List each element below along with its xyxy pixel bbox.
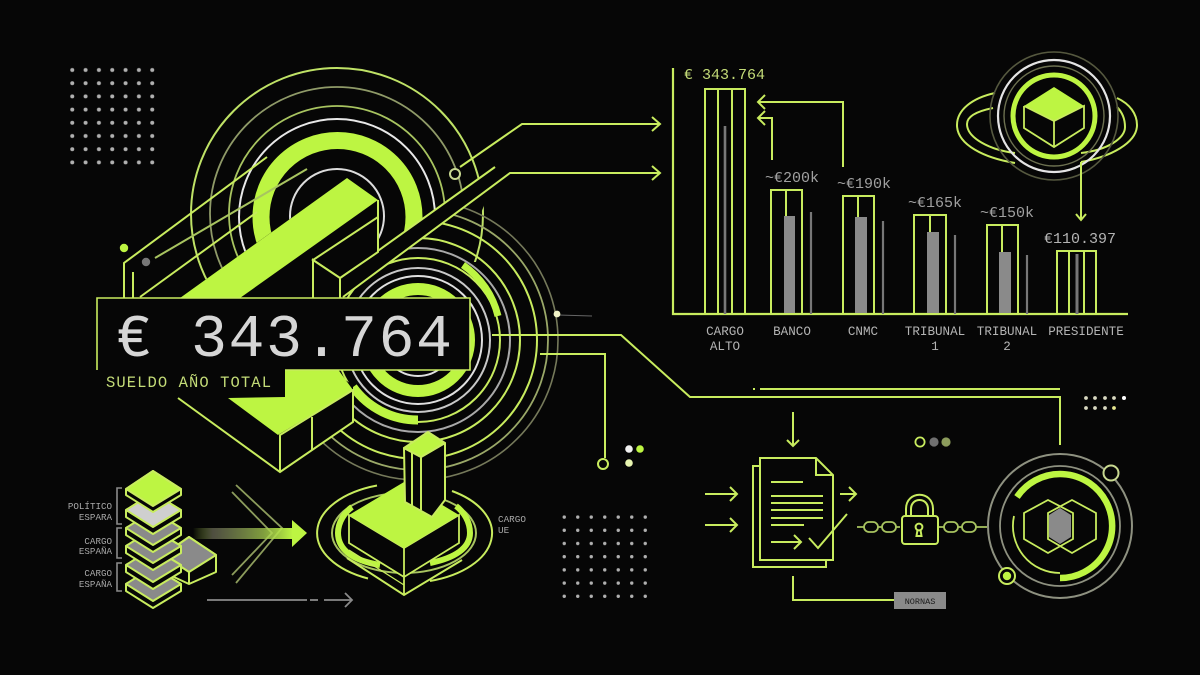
category labels: CNMC [848, 325, 879, 339]
value labels: €110.397 [1044, 231, 1116, 248]
icon: document with check [753, 458, 847, 567]
bar: tribunal 1 [914, 215, 955, 314]
stack labels: ESPAÑA [79, 546, 112, 557]
inputs arrows [705, 487, 737, 532]
building label [498, 514, 526, 536]
icon: orbiting cube [957, 52, 1137, 180]
icon: hexagon core ring [988, 454, 1132, 598]
dot grid: centre [558, 510, 652, 603]
timeline arrow [207, 593, 352, 607]
normas connector [793, 576, 894, 600]
category labels: 1 [931, 340, 939, 354]
bar: cnmc [843, 196, 883, 314]
bar: presidente [1057, 251, 1096, 314]
category labels: ALTO [710, 340, 740, 354]
category labels: TRIBUNAL [905, 325, 965, 339]
value labels [684, 67, 1116, 248]
stack layers [126, 471, 181, 608]
status dots [915, 437, 951, 447]
normas tag: NORNAS [905, 597, 935, 607]
arrow: out of document [840, 487, 856, 501]
stack labels: CARGO [84, 568, 112, 579]
category labels: TRIBUNAL [977, 325, 1037, 339]
stack labels [68, 501, 112, 590]
building label: UE [498, 525, 510, 536]
isometric bar: lower block [178, 368, 353, 472]
stack labels: ESPARA [79, 512, 112, 523]
tower [404, 432, 445, 517]
connector node: lime dot [120, 244, 128, 252]
diagonal connector lines [124, 117, 660, 298]
subtitle panel [97, 370, 285, 397]
category labels: BANCO [773, 325, 811, 339]
flow node: end ring [598, 459, 608, 469]
category labels [706, 325, 1124, 354]
concentric rings: lower [323, 208, 559, 480]
dot grid: right [1084, 396, 1126, 410]
connector node: grey dot [142, 258, 150, 266]
connector node: ring [450, 169, 460, 179]
value labels: € 343.764 [684, 67, 765, 84]
bar chart [673, 67, 1128, 354]
comparison arrows [758, 95, 843, 167]
data flow lines [492, 315, 1060, 458]
category labels: CARGO [706, 325, 744, 339]
value labels: ~€190k [837, 176, 891, 193]
arrow: into document [787, 412, 799, 446]
normas tag [894, 592, 946, 609]
chart axes [673, 68, 1128, 314]
value labels: ~€200k [765, 170, 819, 187]
stack labels: ESPAÑA [79, 579, 112, 590]
icon: padlock [902, 495, 938, 544]
concentric rings: upper [190, 67, 484, 280]
dot grid: top left [66, 63, 159, 169]
icon: chain [857, 522, 987, 532]
stack labels: POLÍTICO [68, 501, 112, 512]
small dot cluster [625, 445, 644, 467]
stack labels: CARGO [84, 536, 112, 547]
isometric building with rings [316, 432, 492, 595]
value labels: ~€150k [980, 205, 1034, 222]
headline value panel [97, 298, 470, 375]
headline value: € 343.764 [116, 307, 452, 375]
arrow: orbit to presidente [1076, 162, 1086, 220]
subtitle: SUELDO AÑO TOTAL [106, 374, 271, 392]
isometric bar: large block [180, 178, 378, 298]
bar: tribunal 2 [987, 225, 1027, 314]
flow node: bright dot [554, 311, 560, 317]
stacked cargos [126, 471, 216, 608]
building label: CARGO [498, 514, 526, 525]
side block [163, 537, 216, 584]
bar: cargo alto [705, 89, 745, 314]
bar: banco [771, 190, 811, 314]
category labels: PRESIDENTE [1048, 325, 1124, 339]
transfer arrow with chevrons [193, 485, 307, 583]
stack brackets [117, 488, 122, 591]
category labels: 2 [1003, 340, 1011, 354]
value labels: ~€165k [908, 195, 962, 212]
